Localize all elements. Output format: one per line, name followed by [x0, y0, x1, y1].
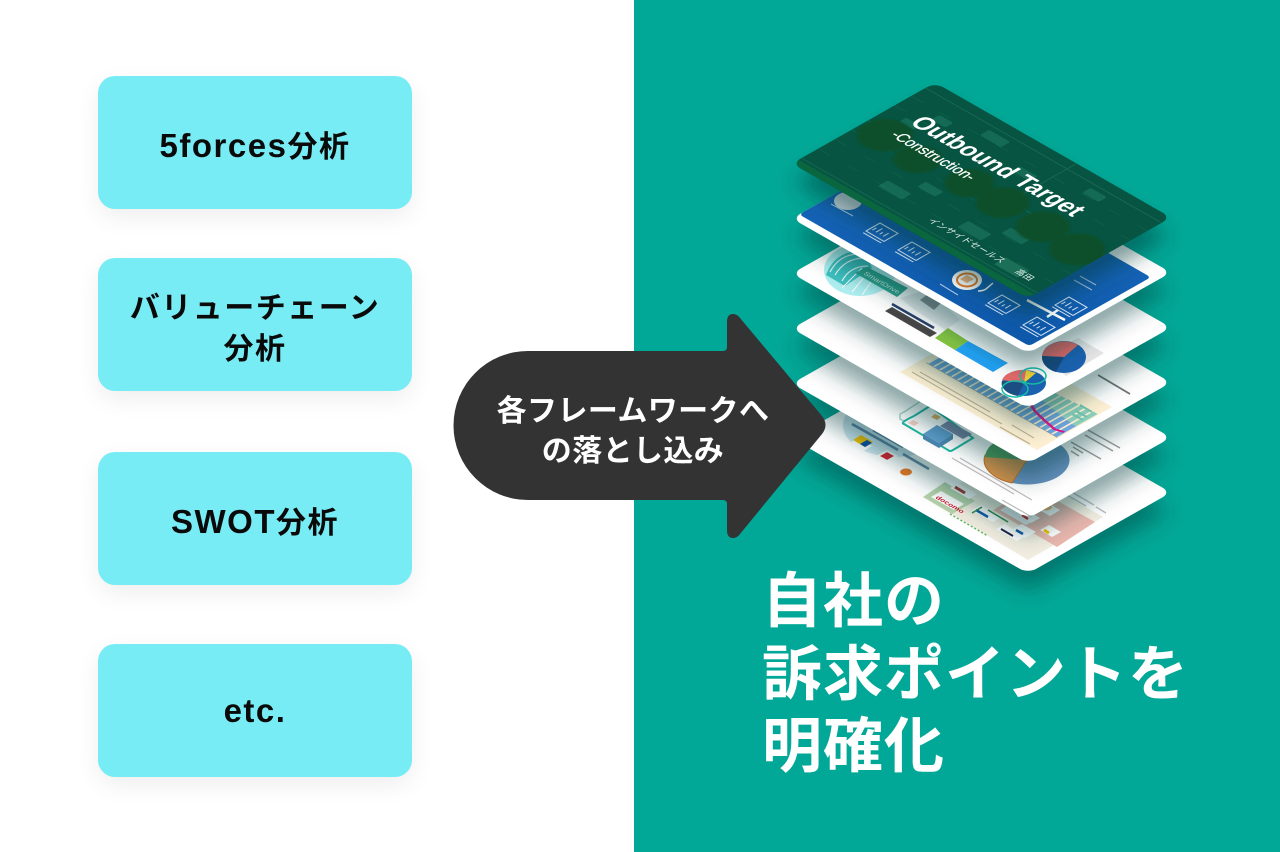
blue background [799, 146, 1151, 346]
map grey [900, 290, 960, 330]
text: right caption lines [1058, 484, 1106, 513]
slide 5: pie and diagram [792, 302, 1171, 537]
cars [878, 116, 1106, 278]
slide 1: green title slide [792, 82, 1172, 317]
chart legend [1072, 405, 1092, 420]
caption lines [952, 458, 1032, 517]
flow diagram box [900, 401, 973, 451]
button: SWOT analysis [98, 452, 412, 585]
button: 5forces analysis [98, 76, 412, 209]
bottom pie [1002, 368, 1046, 397]
slide 2: blue [792, 138, 1171, 372]
pale panel [900, 329, 1112, 450]
road lines [802, 82, 1171, 293]
text: -Construction-: -Construction- [886, 129, 981, 183]
logo disc [843, 393, 947, 476]
small text [831, 204, 1096, 295]
button: etc: etc. [224, 692, 286, 729]
bar green [935, 328, 968, 350]
top pie [1042, 338, 1104, 376]
pie chart [984, 436, 1070, 484]
button: value chain analysis: 分析 [224, 332, 286, 366]
panel notes [912, 372, 1034, 444]
trees [856, 119, 1106, 266]
SmartDrive band [855, 267, 908, 297]
icons [863, 223, 1087, 337]
heading lines [885, 304, 937, 337]
heading: clarify selling points: 訴求ポイントを [762, 640, 1189, 708]
white connector [1027, 300, 1065, 320]
bar chart [926, 339, 1098, 437]
teal fan graphic [824, 244, 896, 296]
arrow label: の落とし込み [542, 435, 724, 468]
panel: teal background [634, 0, 1280, 852]
illustration: stack of isometric slides [790, 85, 1174, 597]
button: value chain analysis [98, 258, 412, 391]
text: right caption [1071, 430, 1120, 459]
text: presenter name: 高田 [1012, 268, 1037, 282]
text: Outbound Target: Outbound Target [903, 113, 1092, 220]
left edge strip [792, 160, 1035, 298]
button: SWOT analysis: SWOT分析 [171, 503, 339, 540]
orange circle [952, 270, 993, 291]
slide 3: SmartDrive [792, 192, 1171, 427]
button: etc [98, 644, 412, 777]
heading: clarify selling points: 自社の [762, 568, 945, 635]
text: docomo logo: docomo [934, 495, 966, 515]
slide 6: logos [792, 358, 1171, 592]
circle top [834, 192, 862, 210]
arrow label: 各フレームワークへ [497, 395, 769, 428]
text: inside sales: インサイドセールス [925, 217, 1008, 264]
text: SmartDrive: SmartDrive [862, 271, 902, 295]
heading: clarify selling points [762, 568, 1189, 780]
text: right heading [1098, 375, 1130, 394]
button: 5forces analysis: 5forces分析 [160, 127, 350, 164]
bar blue [955, 341, 1008, 372]
arrow label [497, 394, 769, 468]
relation diagram panel [923, 464, 1103, 560]
button: value chain analysis: バリューチェーン [130, 292, 380, 324]
slide 4: bar chart panel [792, 248, 1171, 482]
heading: clarify selling points: 明確化 [762, 713, 945, 780]
